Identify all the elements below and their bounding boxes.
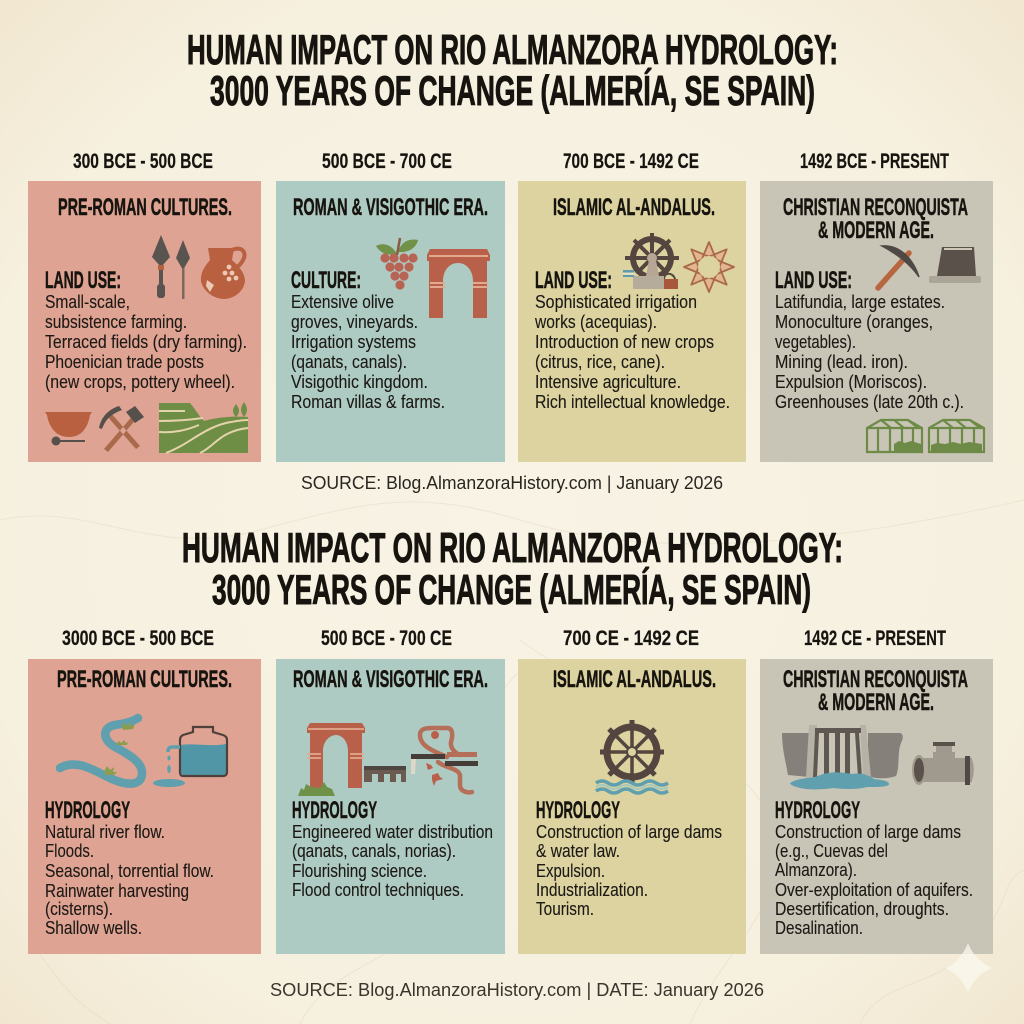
land use text: Introduction of new crops [535,331,714,352]
land use text: subsistence farming. [45,311,187,332]
land use text: LAND USE: [535,267,612,294]
icon: clay jug [201,248,245,299]
hydrology text: Over-exploitation of aquifers. [775,879,973,900]
land use text: Terraced fields (dry farming). [45,331,247,352]
icon: Roman arch [427,249,490,318]
hydrology text: Construction of large dams [775,821,961,842]
panel: Christian land use [760,181,993,462]
panel heading [783,194,968,244]
period labels, first block: 500 BCE - 700 CE [322,150,452,173]
land use text [534,267,730,412]
hydrology text: HYDROLOGY [775,797,860,824]
icon: canal network [411,728,478,792]
icon: winding river [60,718,142,784]
panel: Roman hydrology [276,659,505,954]
panel heading: & MODERN AGE. [818,217,934,244]
land use text: Small-scale, [45,291,130,312]
hydrology text: Expulsion. [536,860,605,881]
hydrology text: Seasonal, torrential flow. [45,860,214,881]
panel: Islamic land use: ISLAMIC AL-ANDALUS. [553,194,715,221]
icon: terraced fields [159,402,248,453]
land use text: Latifundia, large estates. [775,291,945,312]
panel: Islamic hydrology: ISLAMIC AL-ANDALUS. [553,666,716,693]
panel: pre-Roman hydrology: PRE-ROMAN CULTURES. [57,666,232,693]
culture text: Roman villas & farms. [291,391,445,412]
land use text: (citrus, rice, cane). [535,351,665,372]
hydrology text [775,797,973,938]
main title, first block [187,26,838,114]
icon: grapes [376,238,418,290]
hydrology text [45,797,214,938]
period labels, first block: 700 BCE - 1492 CE [563,150,699,173]
panel: pre-Roman land use [28,181,261,462]
panel: Islamic hydrology [518,659,746,954]
culture text: groves, vineyards. [291,311,418,332]
period labels, second block: 700 CE - 1492 CE [563,627,699,650]
hydrology text: (qanats, canals, norias). [292,840,456,861]
icon: eight-pointed star [684,242,734,292]
panel: Roman land use [276,181,505,462]
panel: Islamic land use [518,181,746,462]
icon: arch and aqueduct [298,723,406,796]
hydrology text: (cisterns). [45,898,113,919]
hydrology text [536,797,722,919]
hydrology text: Engineered water distribution [292,821,493,842]
icon: spears [152,235,190,299]
hydrology text: Shallow wells. [45,917,142,938]
icon: dam with spillway [782,725,903,789]
panel heading: & MODERN AGE. [818,689,934,716]
hydrology text: HYDROLOGY [292,797,377,824]
panel heading [783,666,968,716]
hydrology text: Construction of large dams [536,821,722,842]
period labels, first block: 300 BCE - 500 BCE [73,150,213,173]
land use text: Sophisticated irrigation [535,291,697,312]
panel: pre-Roman hydrology [28,659,261,954]
icon: sparkle watermark [945,943,992,992]
land use text [45,267,247,392]
hydrology text: Rainwater harvesting [45,880,189,901]
hydrology text: (e.g., Cuevas del [775,840,888,861]
land use text [775,267,964,412]
panel: Christian hydrology [760,659,993,954]
main title, second block [182,524,843,613]
hydrology text: HYDROLOGY [45,797,130,824]
land use text: Greenhouses (late 20th c.). [775,391,964,412]
icon: bowl and ladle [45,412,92,446]
panel: Roman hydrology: ROMAN & VISIGOTHIC ERA. [293,666,488,693]
hydrology text: Desalination. [775,917,863,938]
icon: pick and hammer [99,406,144,452]
culture text: Irrigation systems [291,331,416,352]
source line, second block: SOURCE: Blog.AlmanzoraHistory.com | DATE: January 2026 [270,979,764,1000]
period labels, second block: 1492 CE - PRESENT [804,627,946,650]
hydrology text: Natural river flow. [45,821,165,842]
culture text: Extensive olive [291,291,394,312]
period labels, first block [73,150,949,173]
land use text: Mining (lead. iron). [775,351,908,372]
hydrology text: Flourishing science. [292,860,427,881]
land use text: LAND USE: [45,267,121,294]
icon: pickaxe [878,246,919,288]
culture text: (qanats, canals). [291,351,407,372]
icon: waves [596,781,668,793]
land use text: Monoculture (oranges, [775,311,933,332]
hydrology text: Tourism. [536,898,594,919]
icon: mine structure [929,247,981,283]
hydrology text: Floods. [45,840,94,861]
panel: pre-Roman land use: PRE-ROMAN CULTURES. [58,194,232,221]
period labels, second block [62,627,946,650]
icon: water wheel with stone channel [623,233,679,289]
period labels, second block: 3000 BCE - 500 BCE [62,627,214,650]
icon: cistern and wells [153,727,227,787]
culture text [291,267,445,412]
culture text: Visigothic kingdom. [291,371,428,392]
icon: T-shaped pipe [912,742,974,785]
icon: water wheel [600,720,664,784]
land use text: (new crops, pottery wheel). [45,371,235,392]
land use text: Phoenician trade posts [45,351,204,372]
hydrology text [292,797,493,900]
source line, first block: SOURCE: Blog.AlmanzoraHistory.com | January 2026 [301,472,723,493]
period labels, first block: 1492 BCE - PRESENT [800,150,949,173]
icon: greenhouses [867,420,984,452]
land use text: Intensive agriculture. [535,371,681,392]
culture text: CULTURE: [291,267,361,294]
land use text: works (acequias). [534,311,657,332]
hydrology text: Industrialization. [536,879,648,900]
hydrology text: HYDROLOGY [536,797,620,824]
panel: Roman land use: ROMAN & VISIGOTHIC ERA. [293,194,488,221]
land use text: LAND USE: [775,267,852,294]
land use text: Rich intellectual knowledge. [535,391,730,412]
hydrology text: Almanzora). [775,859,857,880]
hydrology text: Flood control techniques. [292,879,464,900]
hydrology text: & water law. [536,840,620,861]
land use text: Expulsion (Moriscos). [775,371,927,392]
land use text: vegetables). [775,331,856,352]
hydrology text: Desertification, droughts. [775,898,949,919]
period labels, second block: 500 BCE - 700 CE [321,627,452,650]
